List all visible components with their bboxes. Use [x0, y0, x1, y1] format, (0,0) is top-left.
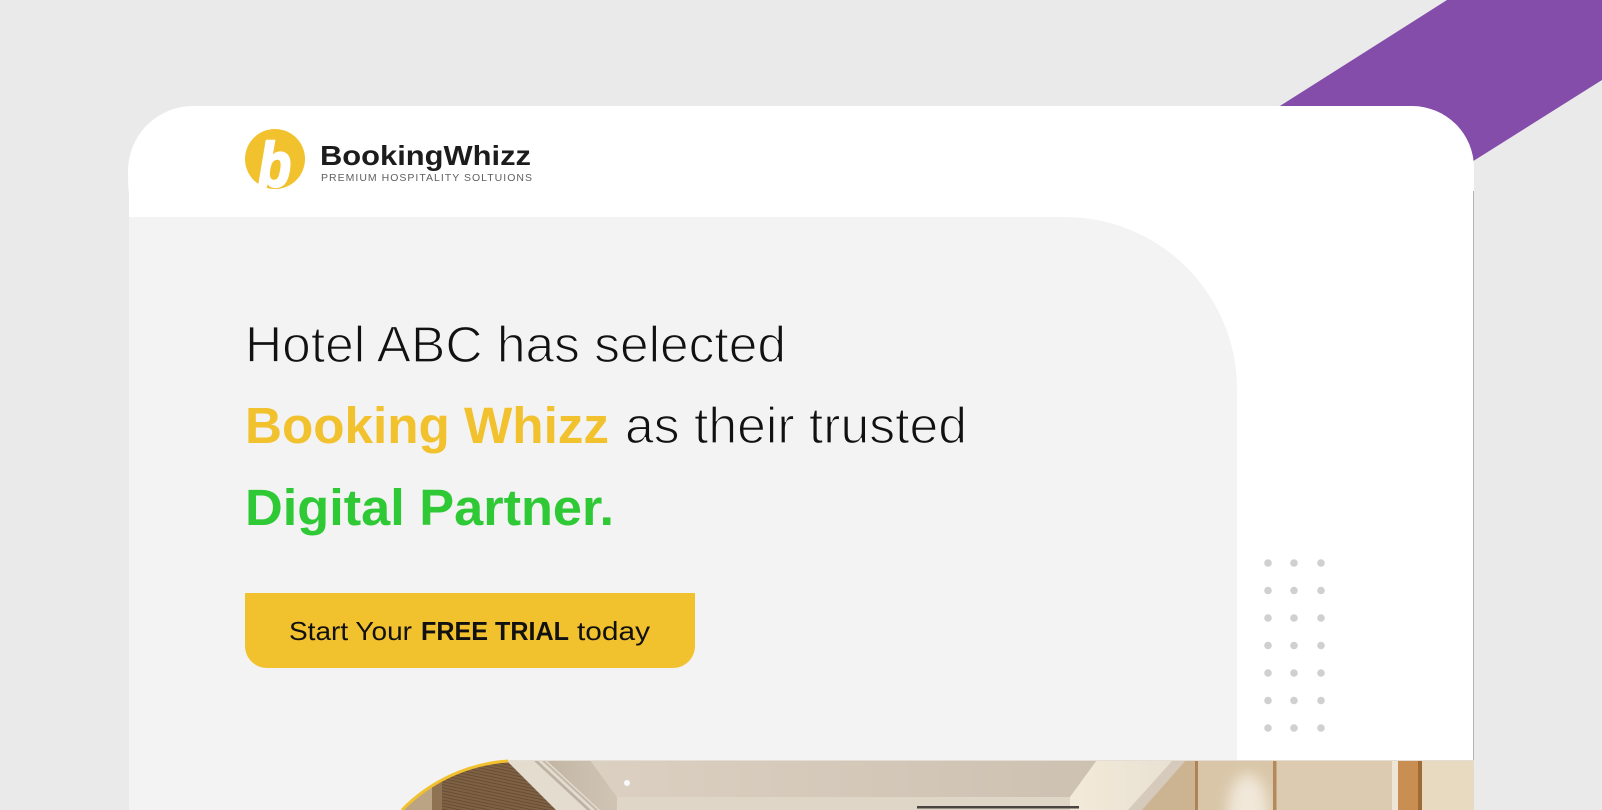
button: free trial: [245, 593, 695, 668]
logo tagline: PREMIUM HOSPITALITY SOLTUIONS: [321, 172, 532, 184]
button label: Start Your: [289, 616, 412, 646]
icon: logo badge: b: [258, 131, 291, 200]
hotel room photo: [390, 760, 1474, 810]
panel: headline background: [129, 217, 1237, 810]
button label: [289, 616, 650, 646]
icon: logo badge: [245, 129, 305, 189]
button label: today: [577, 616, 650, 646]
heading line 1: Hotel ABC has selected: [245, 316, 786, 373]
heading brand name: Booking Whizz: [245, 397, 609, 454]
purple diagonal ribbon: [1250, 0, 1602, 182]
logo wordmark: BookingWhizz: [320, 140, 531, 171]
heading line 3: Digital Partner.: [245, 479, 614, 536]
yellow photo outline arc: [402, 761, 508, 810]
heading: [245, 316, 967, 536]
logo: [245, 129, 532, 189]
white card: [128, 106, 1474, 810]
heading line 2: as their trusted: [625, 397, 967, 454]
dot grid: [1264, 559, 1325, 732]
button label: FREE TRIAL: [421, 616, 569, 646]
